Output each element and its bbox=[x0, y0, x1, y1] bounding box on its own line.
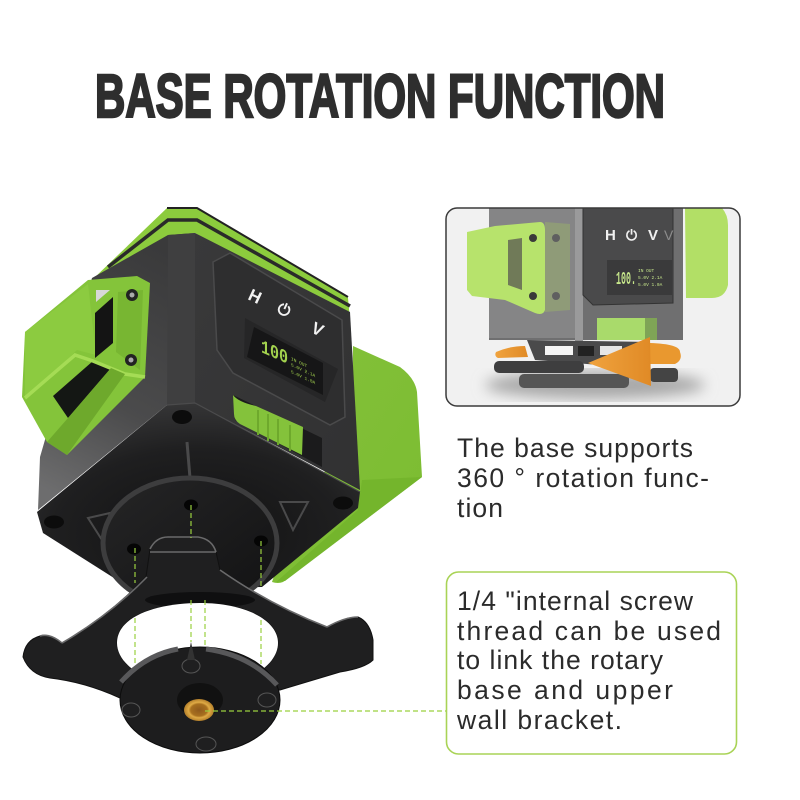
inset control panel bbox=[583, 208, 673, 305]
inset panel: base rotation photo: 5.0V 1.0A bbox=[638, 282, 663, 288]
inset base feet bbox=[494, 361, 584, 373]
inset display bbox=[607, 260, 672, 295]
control panel bbox=[213, 253, 345, 425]
orange rotation arrow bbox=[495, 337, 681, 386]
lower base disc bbox=[120, 642, 280, 753]
callout: internal screw thread bbox=[446, 572, 736, 754]
front face bbox=[195, 233, 360, 490]
callout: internal screw thread: base and upper bbox=[457, 675, 673, 705]
button labels: H bbox=[245, 285, 264, 308]
left face bbox=[38, 233, 195, 510]
green top trim bbox=[92, 208, 350, 320]
inset panel: base rotation photo: 5.0V 2.1A bbox=[638, 275, 663, 281]
green laser window bbox=[22, 276, 150, 455]
bolts bbox=[122, 659, 276, 751]
underside base bbox=[37, 403, 360, 590]
brass threaded insert bbox=[184, 699, 214, 721]
callout: internal screw thread: 1/4 "internal screw bbox=[457, 586, 694, 616]
control panel: 100 bbox=[261, 336, 288, 370]
locking slider bbox=[233, 395, 322, 467]
green dashed assembly lines bbox=[135, 505, 446, 711]
callout: internal screw thread: wall bracket. bbox=[456, 705, 622, 735]
inset panel: base rotation photo bbox=[446, 208, 740, 406]
inset panel: base rotation photo: H bbox=[605, 227, 616, 244]
right green side plate bbox=[272, 346, 422, 583]
text block: base rotation description: tion bbox=[457, 493, 503, 523]
callout: internal screw thread: to link the rotary bbox=[457, 645, 664, 675]
control panel: 5.0V 2.1A bbox=[291, 362, 315, 379]
control panel: 5.0V 1.0A bbox=[291, 369, 315, 386]
text block: base rotation description: 360 ° rotation func- bbox=[457, 463, 709, 493]
text block: base rotation description: The base supports bbox=[457, 433, 693, 463]
display bbox=[244, 318, 338, 402]
callout: internal screw thread: thread can be used bbox=[457, 616, 721, 646]
laser level product illustration bbox=[22, 208, 446, 753]
inset right green plate bbox=[685, 208, 728, 298]
control panel: IN OUT bbox=[291, 356, 307, 369]
screw holes bbox=[44, 410, 353, 528]
base shadow bbox=[485, 371, 705, 399]
inset panel: base rotation photo: IN OUT bbox=[638, 268, 655, 274]
inset left laser window bbox=[467, 222, 545, 314]
inset panel: base rotation photo: ⏻ bbox=[626, 228, 637, 244]
inset panel: base rotation photo: 100. bbox=[616, 270, 636, 290]
inset panel: base rotation photo: V bbox=[664, 227, 674, 243]
rotary spider base bbox=[23, 537, 373, 698]
text block: base rotation description bbox=[457, 433, 709, 523]
mounting disc bbox=[88, 442, 308, 608]
inset slider bbox=[597, 318, 645, 340]
inset panel: base rotation photo: V bbox=[648, 227, 658, 244]
inset pedestal bbox=[527, 340, 639, 364]
control panel: ⏻ bbox=[274, 298, 294, 321]
bolts bbox=[126, 289, 138, 301]
control panel: V bbox=[308, 318, 327, 341]
translucent body bbox=[489, 208, 683, 340]
